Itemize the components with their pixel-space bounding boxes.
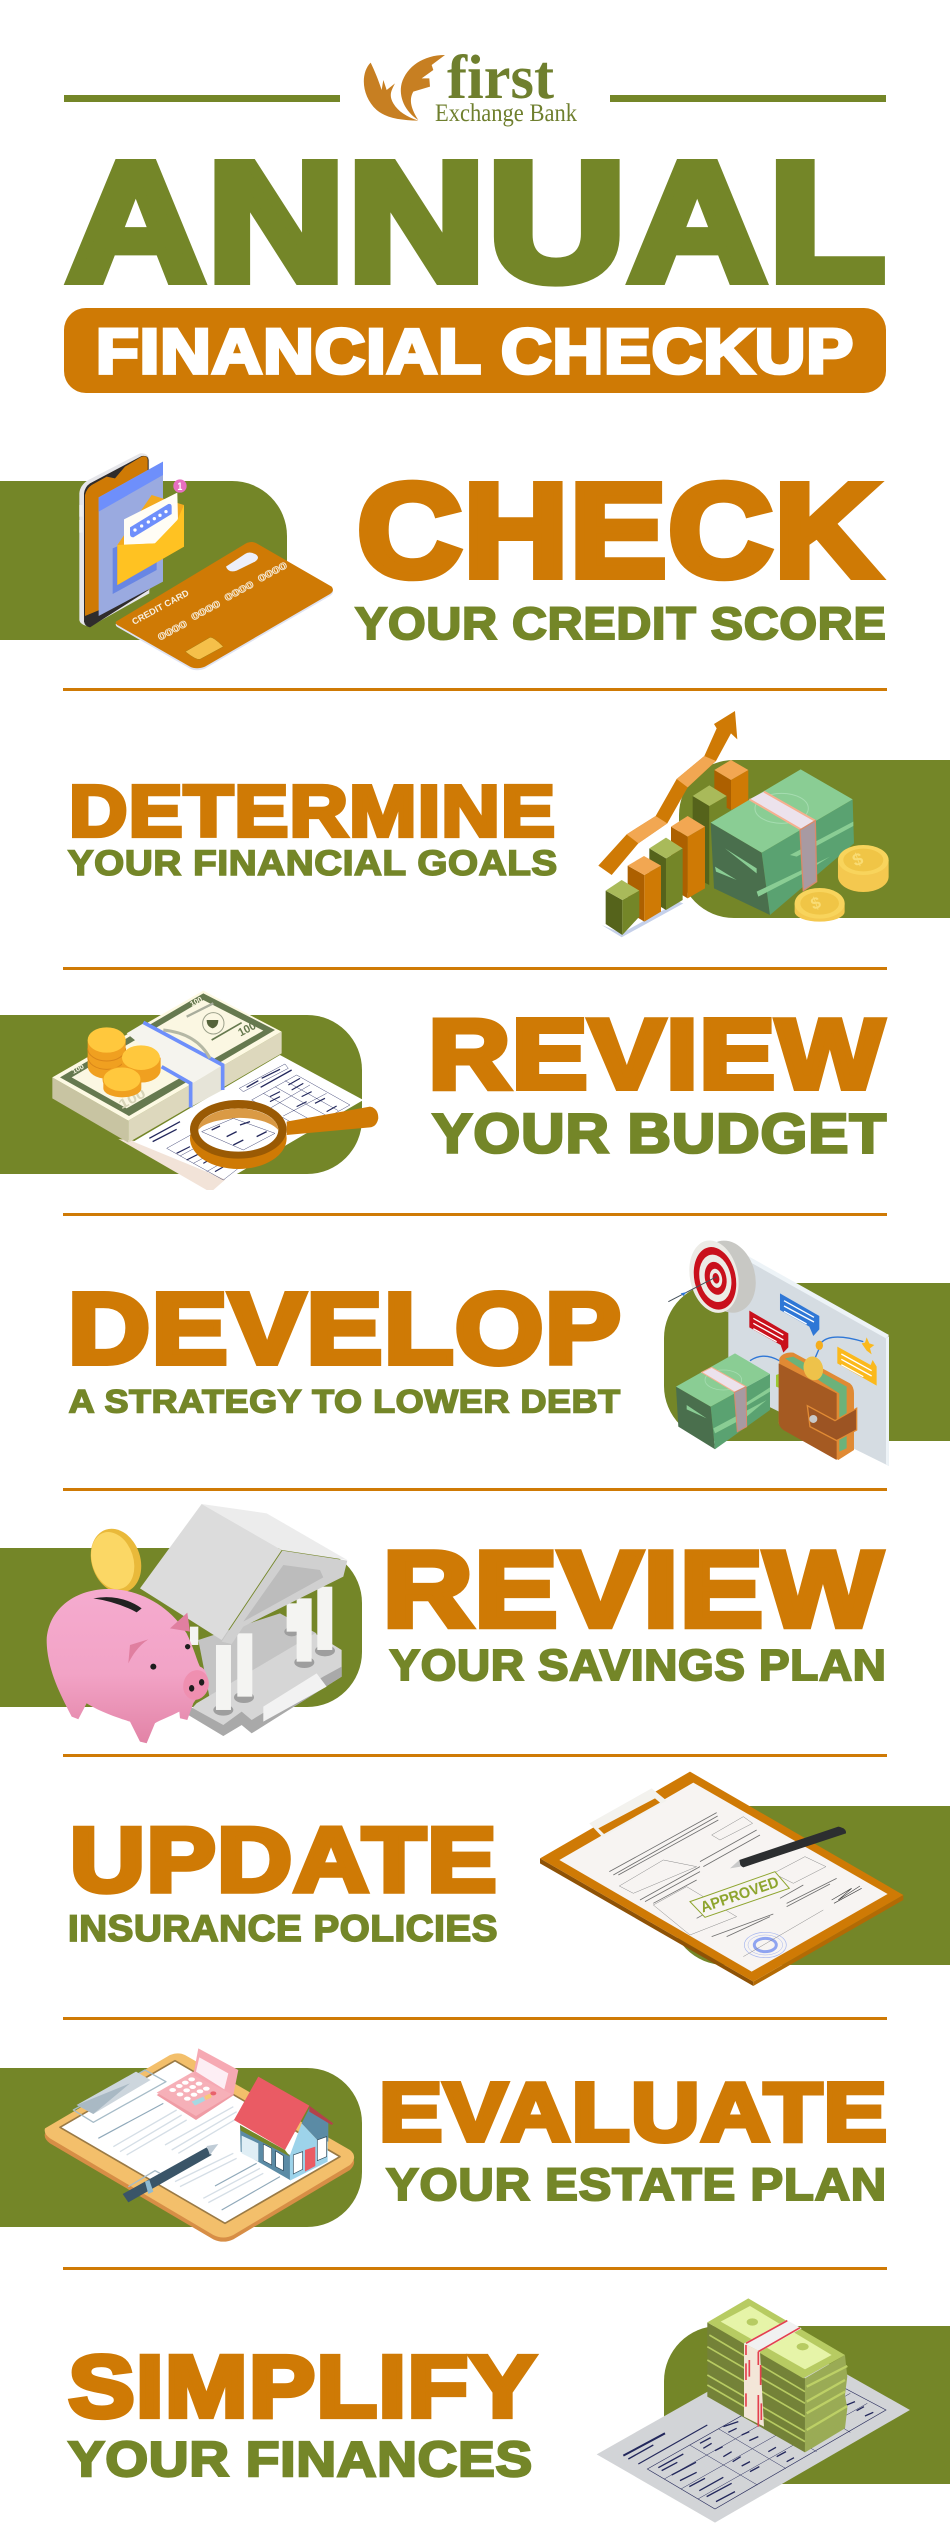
logo: First Exchange Bank: first — [447, 44, 554, 112]
icon: approved document on clipboard with pen: APPROVED — [698, 1874, 781, 1916]
icon: phone and credit card — [79, 453, 333, 670]
icon: phone and credit card: 0000 — [223, 579, 255, 603]
panel: develop a strategy to lower debt — [68, 1234, 950, 1466]
title: ANNUAL: ANNUAL — [67, 127, 888, 316]
panel: determine your financial goals — [68, 711, 950, 937]
heading: UPDATE: UPDATE — [70, 1810, 498, 1911]
panel: simplify your finances — [68, 2298, 950, 2523]
logo: First Exchange Bank — [364, 44, 577, 127]
icon: target, wallet, cash and chat bubbles — [668, 1234, 889, 1466]
panel: evaluate your estate plan — [0, 2048, 888, 2242]
icon: cash, coins, spreadsheet and magnifier: 100 — [116, 1085, 148, 1112]
icon: phone and credit card: 0000 — [256, 560, 289, 584]
icon: stacked cash on spreadsheet — [597, 2298, 910, 2523]
icon: phone and credit card: CREDIT CARD — [130, 587, 191, 627]
subheading: your savings plan: YOUR SAVINGS PLAN — [390, 1642, 886, 1690]
icon: approved document on clipboard with pen — [540, 1772, 903, 1986]
subheading: your budget: YOUR BUDGET — [432, 1102, 887, 1165]
subheading: your financial goals: YOUR FINANCIAL GOALS — [68, 843, 558, 883]
icon: cash, coins, spreadsheet and magnifier: 100 — [236, 1020, 258, 1039]
icon: phone and credit card: 0000 — [156, 619, 189, 642]
icon: cash, coins, spreadsheet and magnifier: 100 — [188, 995, 204, 1008]
icon: cash, coins, spreadsheet and magnifier: 100 — [71, 1063, 86, 1076]
icon: piggy bank and bank building — [47, 1504, 347, 1743]
icon: phone and credit card: 0000 — [190, 599, 222, 622]
subheading: your estate plan: YOUR ESTATE PLAN — [386, 2159, 887, 2210]
heading: REVIEW: REVIEW — [383, 1529, 884, 1649]
subheading: your credit score: YOUR CREDIT SCORE — [355, 598, 886, 649]
banner: Financial Checkup — [64, 308, 886, 393]
banner: Financial Checkup: FINANCIAL CHECKUP — [96, 317, 854, 387]
panel: review your savings plan — [0, 1504, 886, 1743]
icon: bar chart, arrow, cash and coins: $ — [808, 892, 824, 914]
subheading: insurance policies: INSURANCE POLICIES — [68, 1908, 498, 1949]
subheading: your finances: YOUR FINANCES — [68, 2433, 533, 2487]
heading: EVALUATE: EVALUATE — [379, 2066, 888, 2158]
panel: review your budget — [0, 991, 887, 1190]
icon: phone and credit card: 1 — [177, 481, 182, 493]
heading: REVIEW: REVIEW — [428, 999, 885, 1109]
heading: SIMPLIFY: SIMPLIFY — [68, 2338, 537, 2435]
heading: DETERMINE: DETERMINE — [69, 772, 556, 852]
panel: update insurance policies — [68, 1772, 950, 1986]
heading: DEVELOP: DEVELOP — [68, 1273, 622, 1385]
panel: check your credit score — [0, 453, 886, 670]
logo: First Exchange Bank: Exchange Bank — [435, 100, 577, 127]
icon: cash, coins, spreadsheet and magnifier — [52, 991, 378, 1190]
icon: bar chart, arrow, cash and coins: $ — [850, 848, 866, 870]
header with logo — [64, 44, 886, 127]
heading: CHECK: CHECK — [358, 457, 881, 605]
icon: bar chart, arrow, cash and coins — [598, 711, 889, 937]
subheading: a strategy to lower debt: A STRATEGY TO LOWER DEBT — [69, 1382, 621, 1419]
icon: clipboard, calculator, pen and house — [45, 2048, 354, 2242]
